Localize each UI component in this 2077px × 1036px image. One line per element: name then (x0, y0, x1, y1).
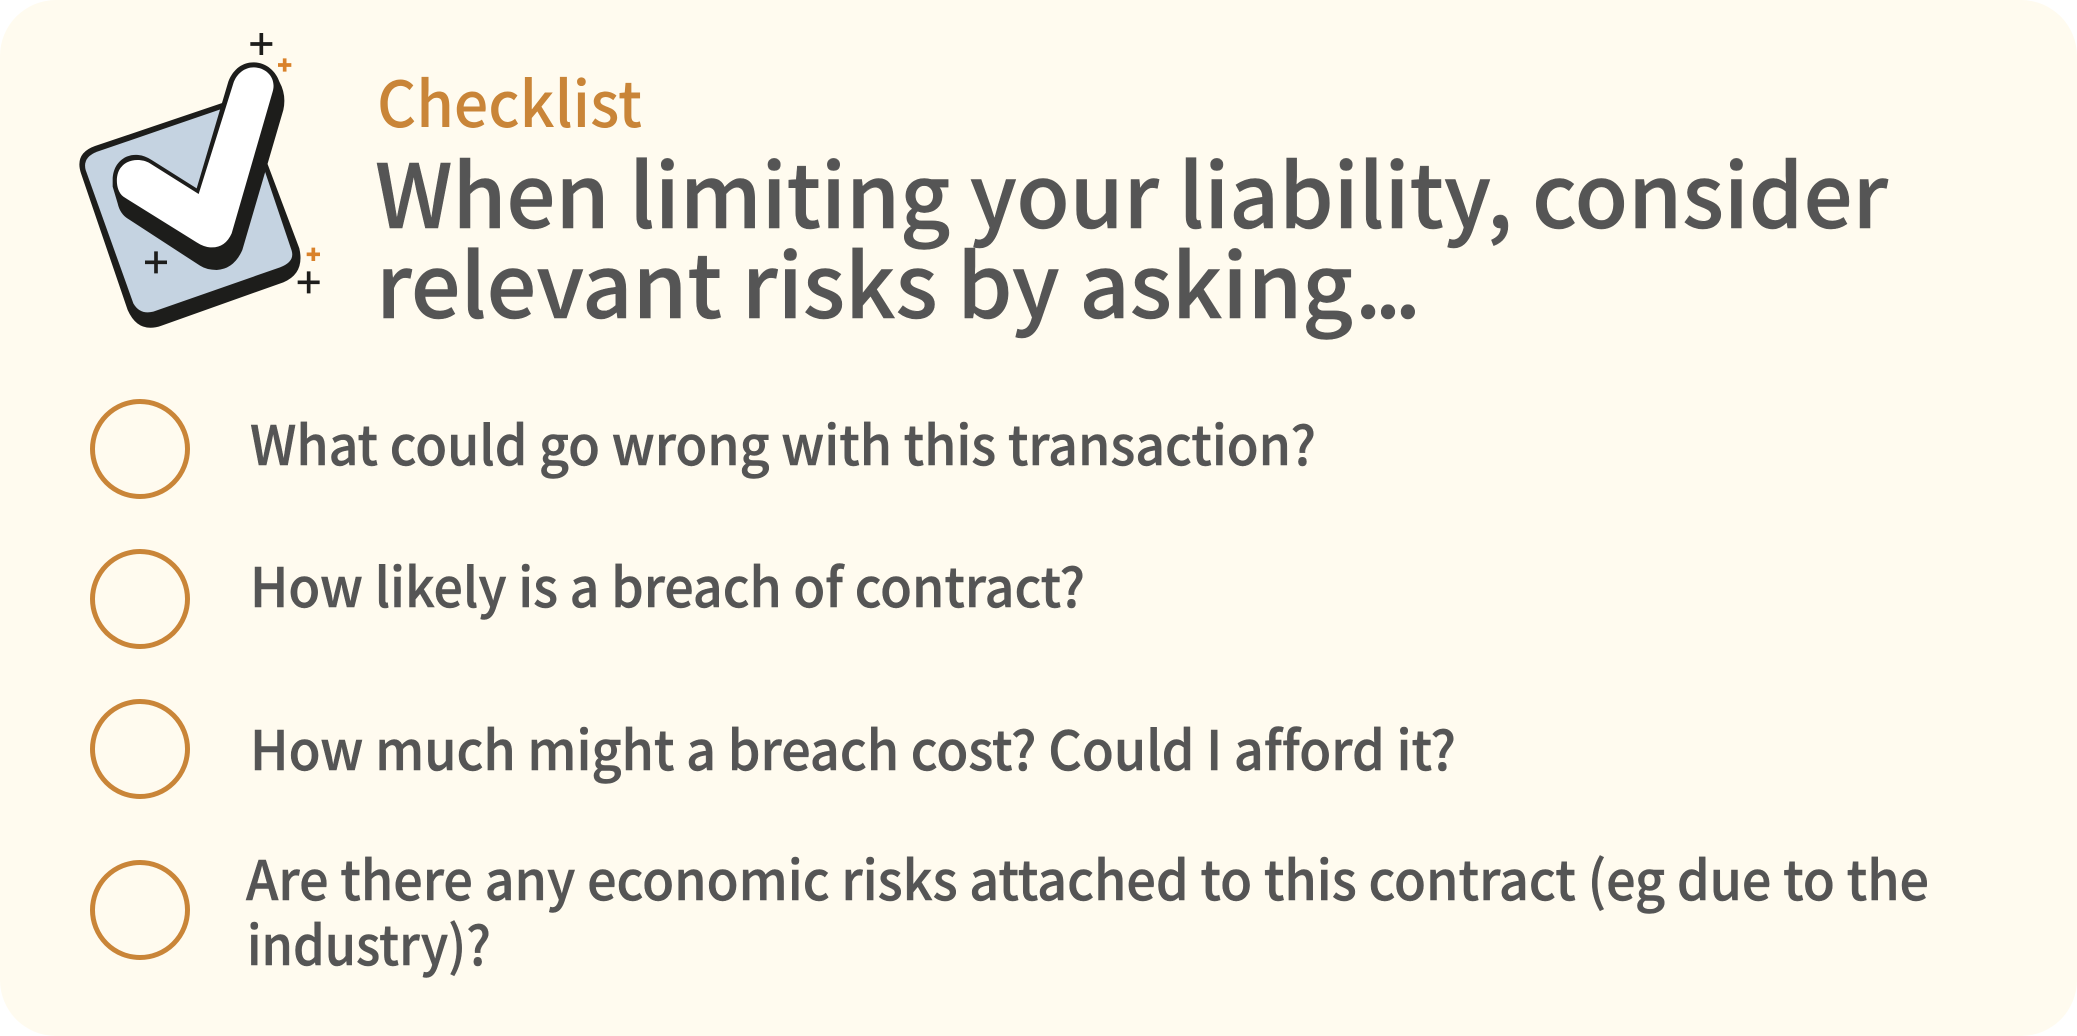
checklist item 4 (92, 837, 1929, 981)
heading: When limiting your liability, consider (375, 127, 1889, 254)
checklist item 2 (92, 544, 1085, 646)
checklist item 1: What could go wrong with this transaction? (250, 402, 1316, 481)
checklist item 2: How likely is a breach of contract? (250, 544, 1085, 623)
checklist item 4: industry)? (247, 902, 491, 981)
heading (375, 127, 1889, 344)
icon: tilted checkbox with check mark (79, 33, 320, 328)
heading: ... (1355, 217, 1421, 344)
label: Checklist: Checklist (377, 55, 642, 146)
checklist item 4: Are there any economic risks attached to this contract (eg due to the (246, 837, 1929, 916)
checklist item 3: How much might a breach cost? Could I afford it? (250, 707, 1456, 786)
heading: relevant risks by asking (376, 217, 1353, 344)
